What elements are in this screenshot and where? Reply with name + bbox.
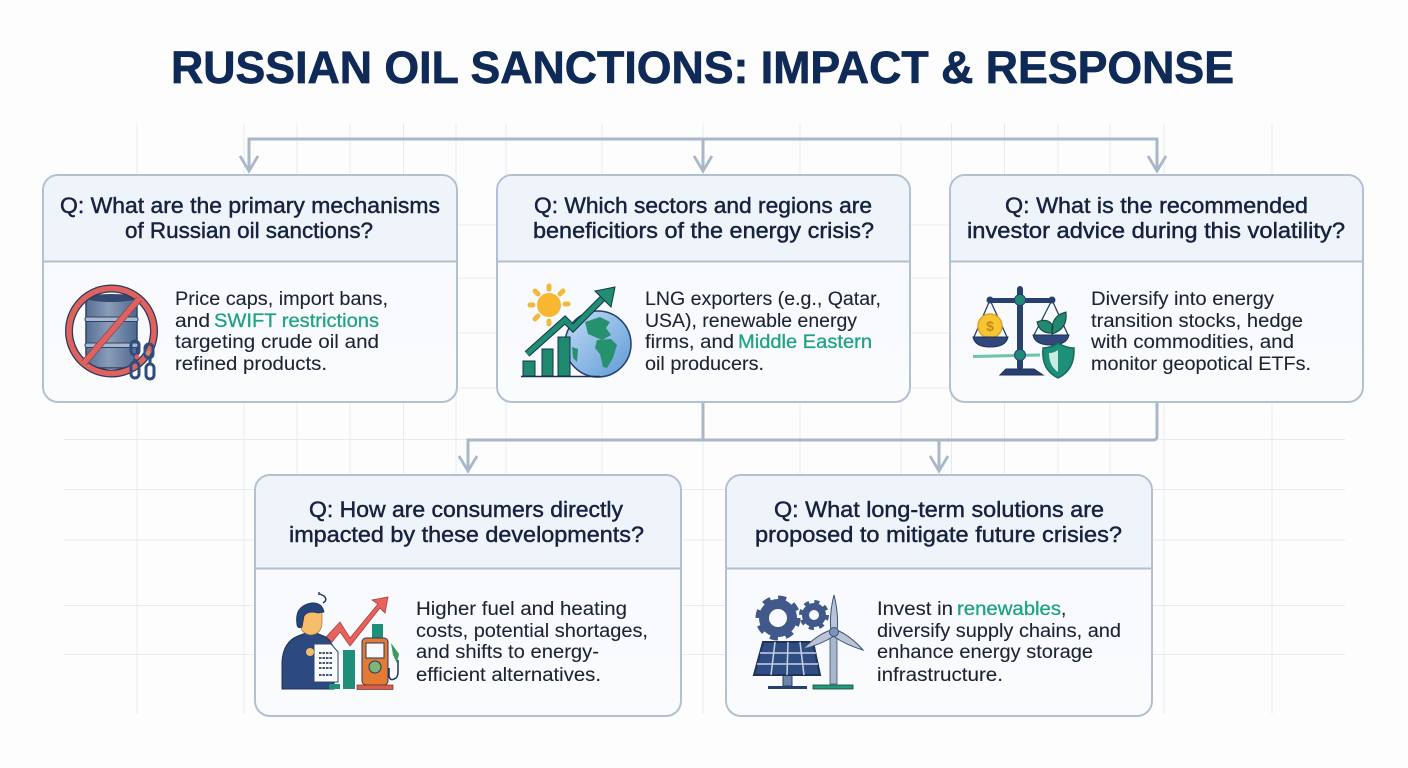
heading: long-term solutions: proposed to mitigate future crisies? bbox=[755, 522, 1122, 547]
arrows: top connector to three cards bbox=[240, 139, 1166, 171]
text: answer: costs, potential shortages, bbox=[416, 621, 648, 642]
text: answer: LNG exporters (e.g., Qatar, bbox=[645, 289, 881, 310]
heading: consumer impact bbox=[289, 497, 644, 547]
text: answer: infrastructure. bbox=[877, 665, 1003, 686]
text: answer: Higher fuel and heating bbox=[416, 599, 627, 620]
text: answer bbox=[877, 599, 1121, 686]
text: answer: oil producers. bbox=[645, 354, 764, 375]
text: answer: enhance energy storage bbox=[877, 642, 1093, 663]
title: RUSSIAN OIL SANCTIONS: IMPACT & RESPONSE bbox=[171, 42, 1234, 93]
panel: beneficiaries bbox=[497, 175, 910, 402]
text: answer: monitor geopotical ETFs. bbox=[1091, 354, 1311, 375]
heading: beneficiaries: beneficitiors of the energy crisis? bbox=[533, 218, 874, 243]
heading: long-term solutions bbox=[755, 497, 1122, 547]
text: answer: efficient alternatives. bbox=[416, 665, 601, 686]
icon: sun, globe and rising chart bbox=[521, 286, 631, 377]
panel: primary mechanisms bbox=[43, 175, 457, 402]
heading: primary mechanisms bbox=[60, 193, 440, 243]
icon: consumer with bill, chart and fuel pump bbox=[282, 592, 399, 690]
text: answer: transition stocks, hedge bbox=[1091, 311, 1303, 332]
text: answer: and bbox=[175, 311, 210, 332]
heading: primary mechanisms: of Russian oil sanctions? bbox=[125, 218, 373, 243]
panel: consumer impact bbox=[255, 475, 681, 716]
text: answer: diversify supply chains, and bbox=[877, 621, 1121, 642]
text: answer: SWIFT restrictions bbox=[214, 311, 379, 332]
icon: balance scale with coin, leaves and shield bbox=[973, 286, 1074, 378]
heading: investor advice bbox=[967, 193, 1345, 243]
heading: consumer impact: Q: How are consumers directly bbox=[309, 497, 623, 522]
heading: long-term solutions: Q: What long-term solutions are bbox=[774, 497, 1104, 522]
text: answer bbox=[645, 289, 881, 375]
text: answer: Invest in bbox=[877, 599, 953, 620]
heading: investor advice: Q: What is the recommended bbox=[1005, 193, 1308, 218]
icon: gears, solar panel and wind turbine bbox=[754, 595, 863, 689]
heading: primary mechanisms: Q: What are the primary mechanisms bbox=[60, 193, 440, 218]
panel: investor advice bbox=[950, 175, 1363, 402]
panel: long-term solutions bbox=[726, 475, 1152, 716]
text: answer: Diversify into energy bbox=[1091, 289, 1275, 310]
text: answer: and shifts to energy- bbox=[416, 642, 599, 663]
text: answer: , bbox=[1061, 599, 1066, 620]
text: answer: targeting crude oil and bbox=[175, 332, 379, 353]
heading: beneficiaries bbox=[533, 193, 874, 243]
heading: consumer impact: impacted by these developments? bbox=[289, 522, 644, 547]
text: answer bbox=[1090, 289, 1311, 375]
text: answer: with commodities, and bbox=[1090, 332, 1294, 353]
text: answer: USA), renewable energy bbox=[645, 311, 858, 332]
text: answer bbox=[416, 599, 648, 686]
text: answer: Price caps, import bans, bbox=[175, 289, 388, 310]
arrows: lower connector to two cards bbox=[459, 402, 1157, 471]
heading: beneficiaries: Q: Which sectors and regions are bbox=[534, 193, 872, 218]
text: answer: Middle Eastern bbox=[738, 332, 872, 353]
text: answer: firms, and bbox=[645, 332, 734, 353]
text: answer bbox=[175, 289, 388, 375]
text: answer: renewables bbox=[957, 599, 1061, 620]
icon: balance scale with coin, leaves and shield: $ bbox=[986, 318, 994, 334]
heading: investor advice: investor advice during this volatility? bbox=[967, 218, 1345, 243]
icon: banned oil barrel with chains bbox=[69, 288, 154, 379]
text: answer: refined products. bbox=[175, 354, 327, 375]
